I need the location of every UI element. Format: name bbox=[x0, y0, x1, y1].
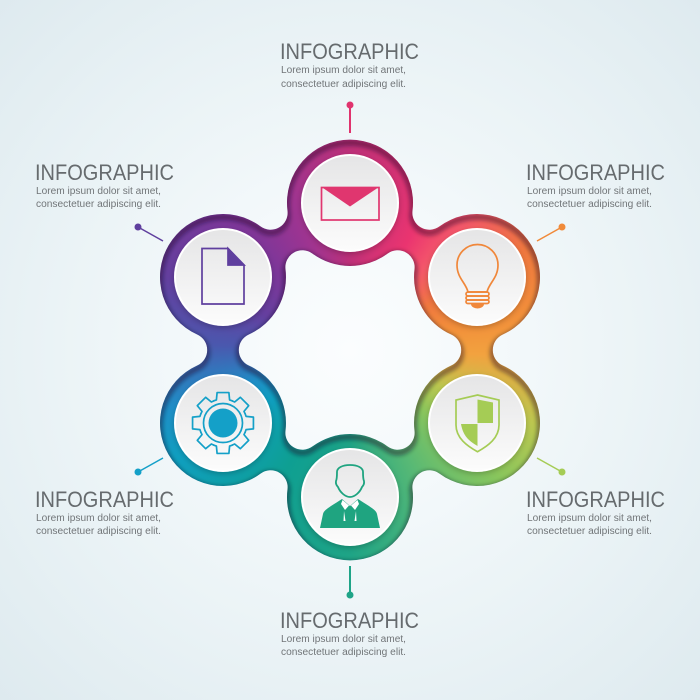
text block: bottom left bbox=[35, 487, 174, 537]
text block: bottom left: consectetuer adipiscing elit. bbox=[36, 526, 161, 537]
icon: document bbox=[202, 248, 244, 304]
text block: top bbox=[280, 39, 419, 90]
connector: bottom bbox=[346, 566, 354, 598]
icon: envelope bbox=[322, 188, 379, 220]
text block: top left: Lorem ipsum dolor sit amet, bbox=[36, 186, 161, 197]
text block: bottom: INFOGRAPHIC bbox=[280, 608, 419, 633]
text block: top: consectetuer adipiscing elit. bbox=[281, 79, 406, 90]
text block: bottom right: Lorem ipsum dolor sit amet, bbox=[527, 513, 652, 524]
text block: top right bbox=[526, 160, 665, 210]
text block: top left: consectetuer adipiscing elit. bbox=[36, 199, 161, 210]
discs: white circles inside the ring bbox=[175, 155, 525, 545]
text block: bottom bbox=[280, 608, 419, 658]
connector: bottom right bbox=[537, 458, 566, 476]
text block: bottom left: INFOGRAPHIC bbox=[35, 487, 174, 512]
text block: top left bbox=[35, 160, 174, 210]
icon: shield bbox=[456, 395, 499, 452]
connector: top left bbox=[134, 224, 163, 241]
text block: top: INFOGRAPHIC bbox=[280, 39, 419, 64]
inner shadow on ring edges bbox=[160, 143, 540, 563]
text block: bottom right: consectetuer adipiscing elit. bbox=[527, 526, 652, 537]
text block: bottom: Lorem ipsum dolor sit amet, bbox=[281, 634, 406, 645]
text block: bottom right bbox=[526, 487, 665, 537]
icon: businessman bbox=[320, 465, 380, 528]
connector: top bbox=[346, 102, 354, 133]
text block: top right: INFOGRAPHIC bbox=[526, 160, 665, 185]
text block: top: Lorem ipsum dolor sit amet, bbox=[281, 65, 406, 76]
icon: gear bbox=[193, 393, 253, 453]
text block: top left: INFOGRAPHIC bbox=[35, 160, 174, 185]
ring: gradient band of six linked circles bbox=[160, 140, 540, 560]
text block: bottom: consectetuer adipiscing elit. bbox=[281, 647, 406, 658]
connector: bottom left bbox=[134, 458, 163, 476]
text block: bottom left: Lorem ipsum dolor sit amet, bbox=[36, 513, 161, 524]
connector: top right bbox=[537, 224, 566, 241]
icon: light bulb bbox=[457, 244, 498, 308]
text block: top right: Lorem ipsum dolor sit amet, bbox=[527, 186, 652, 197]
text block: bottom right: INFOGRAPHIC bbox=[526, 487, 665, 512]
text block: top right: consectetuer adipiscing elit. bbox=[527, 199, 652, 210]
